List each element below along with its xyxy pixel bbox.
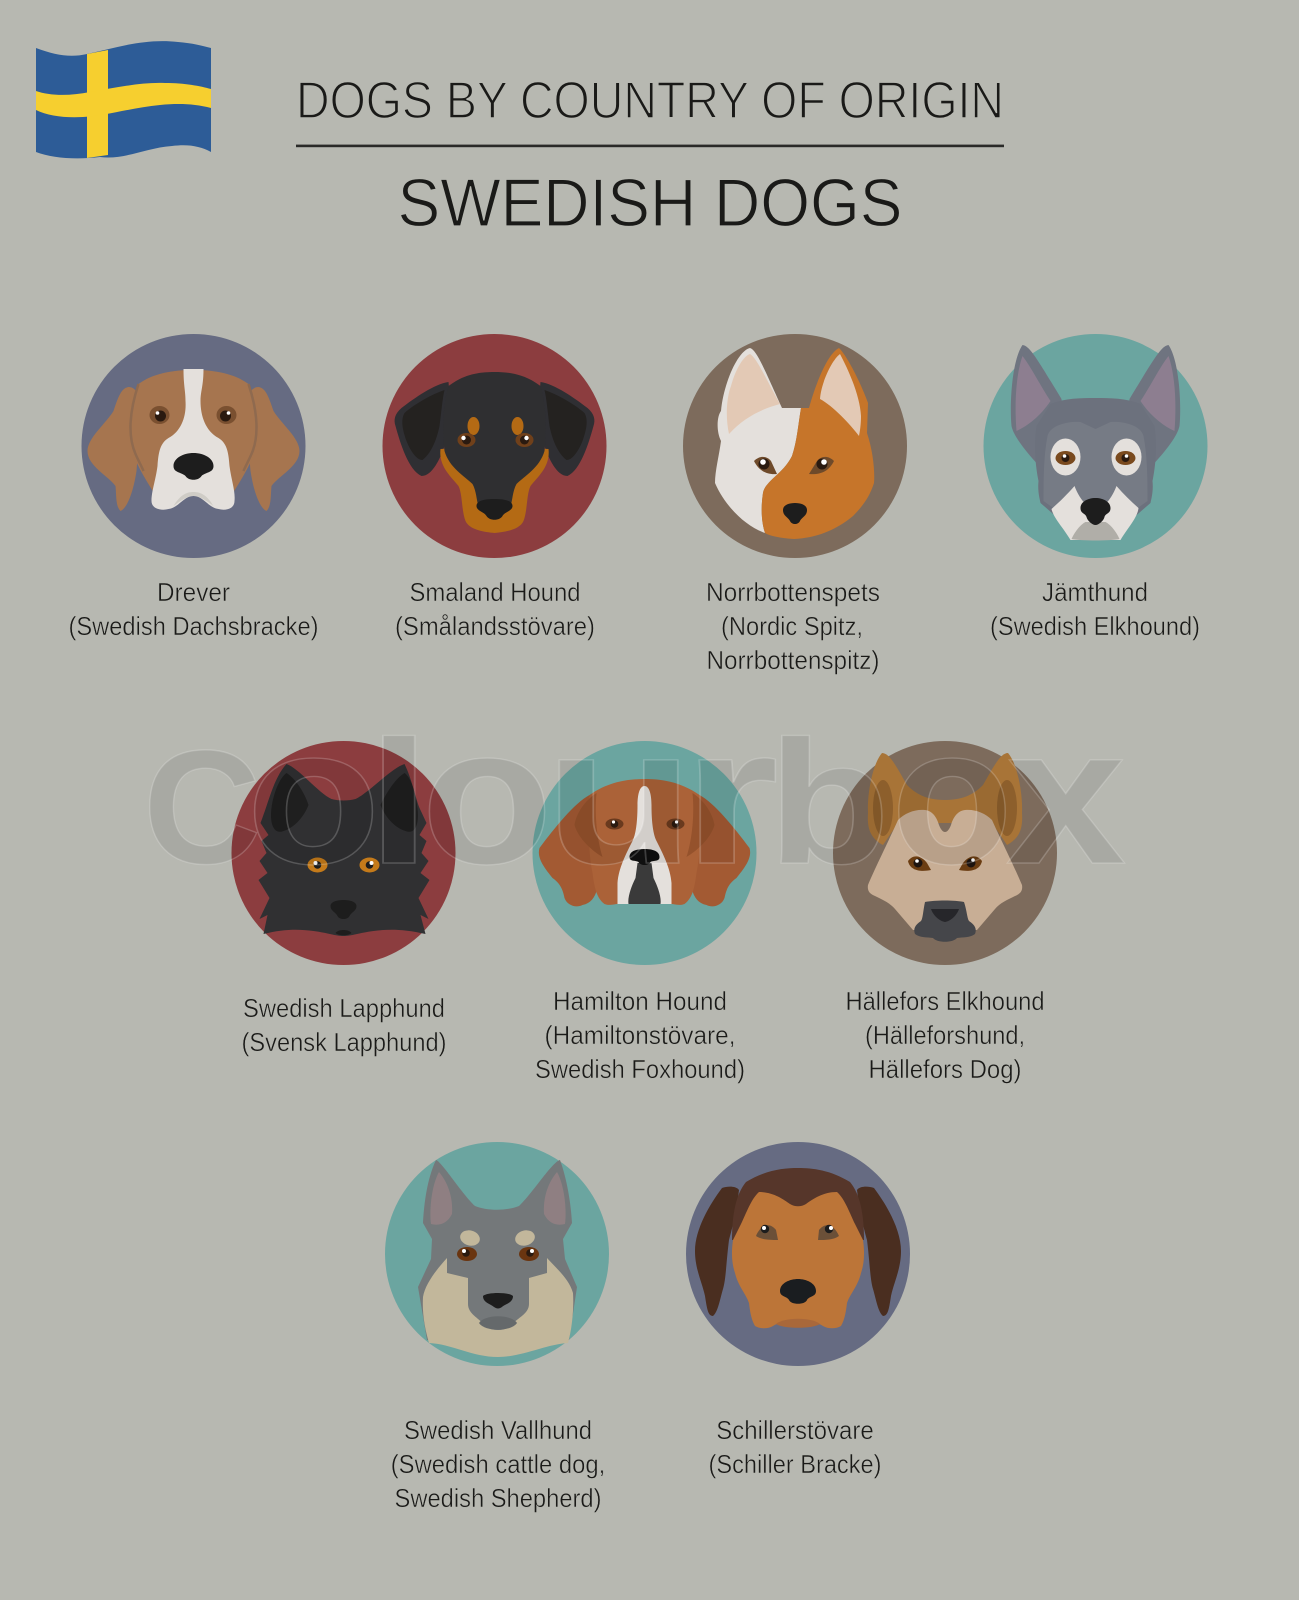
label: Norrbottenspets: Norrbottenspets — [706, 577, 880, 607]
panel: Hamilton Hound portrait — [532, 741, 756, 965]
label: Jämthund — [990, 577, 1200, 641]
label: Drever — [68, 577, 318, 641]
heading: SWEDISH DOGS — [398, 165, 902, 241]
label: Jämthund: Jämthund — [1042, 577, 1148, 607]
watermark: o — [421, 687, 553, 905]
label: Swedish Vallhund — [391, 1415, 605, 1513]
watermark: o — [246, 687, 381, 905]
label: Norrbottenspets: (Nordic Spitz, — [721, 611, 863, 641]
watermark: b — [768, 705, 890, 901]
label: Drever: Drever — [157, 577, 230, 607]
panel: Jämthund portrait — [984, 334, 1208, 558]
label: Smaland Hound: Smaland Hound — [410, 577, 580, 607]
panel: Hällefors Elkhound portrait — [833, 741, 1057, 965]
panel: Swedish Lapphund portrait — [232, 741, 456, 965]
label: Norrbottenspets — [706, 577, 880, 675]
watermark: r — [683, 687, 779, 905]
label: Schillerstövare: (Schiller Bracke) — [708, 1449, 882, 1479]
watermark: x — [1006, 687, 1126, 905]
label: Swedish Vallhund: Swedish Shepherd) — [394, 1483, 602, 1513]
panel: Smaland Hound portrait — [382, 334, 606, 558]
label: Schillerstövare — [708, 1415, 882, 1479]
label: Drever: (Swedish Dachsbracke) — [68, 611, 318, 641]
watermark — [143, 687, 1126, 905]
watermark: o — [891, 687, 1013, 905]
panel: Norrbottenspets portrait — [683, 334, 907, 558]
label: Schillerstövare: Schillerstövare — [716, 1415, 874, 1445]
panel: Schillerstövare portrait — [686, 1142, 910, 1366]
label: Hällefors Elkhound — [846, 986, 1044, 1084]
label: Swedish Vallhund: (Swedish cattle dog, — [391, 1449, 605, 1479]
label: Hamilton Hound: (Hamiltonstövare, — [544, 1020, 736, 1050]
label: Smaland Hound — [395, 577, 595, 641]
label: Hällefors Elkhound: (Hälleforshund, — [865, 1020, 1025, 1050]
watermark: C — [143, 717, 261, 898]
label: Swedish Lapphund — [242, 993, 446, 1057]
label: Hamilton Hound: Swedish Foxhound) — [535, 1054, 745, 1084]
label: Hamilton Hound: Hamilton Hound — [553, 986, 727, 1016]
label: Swedish Lapphund: Swedish Lapphund — [243, 993, 445, 1023]
label: Swedish Lapphund: (Svensk Lapphund) — [242, 1027, 446, 1057]
label: Hällefors Elkhound: Hällefors Elkhound — [846, 986, 1044, 1016]
icon: Swedish flag — [36, 41, 211, 158]
label: Swedish Vallhund: Swedish Vallhund — [404, 1415, 592, 1445]
panel: Drever portrait — [82, 334, 306, 558]
title: DOGS BY COUNTRY OF ORIGIN — [296, 72, 1004, 130]
label: Hällefors Elkhound: Hällefors Dog) — [868, 1054, 1022, 1084]
label: Jämthund: (Swedish Elkhound) — [990, 611, 1200, 641]
watermark: u — [544, 687, 695, 905]
panel: Swedish Vallhund portrait — [385, 1142, 609, 1366]
title divider — [296, 145, 1004, 147]
label: Hamilton Hound — [535, 986, 745, 1084]
watermark: l — [367, 705, 431, 901]
label: Norrbottenspets: Norrbottenspitz) — [706, 645, 880, 675]
label: Smaland Hound: (Smålandsstövare) — [395, 611, 595, 641]
